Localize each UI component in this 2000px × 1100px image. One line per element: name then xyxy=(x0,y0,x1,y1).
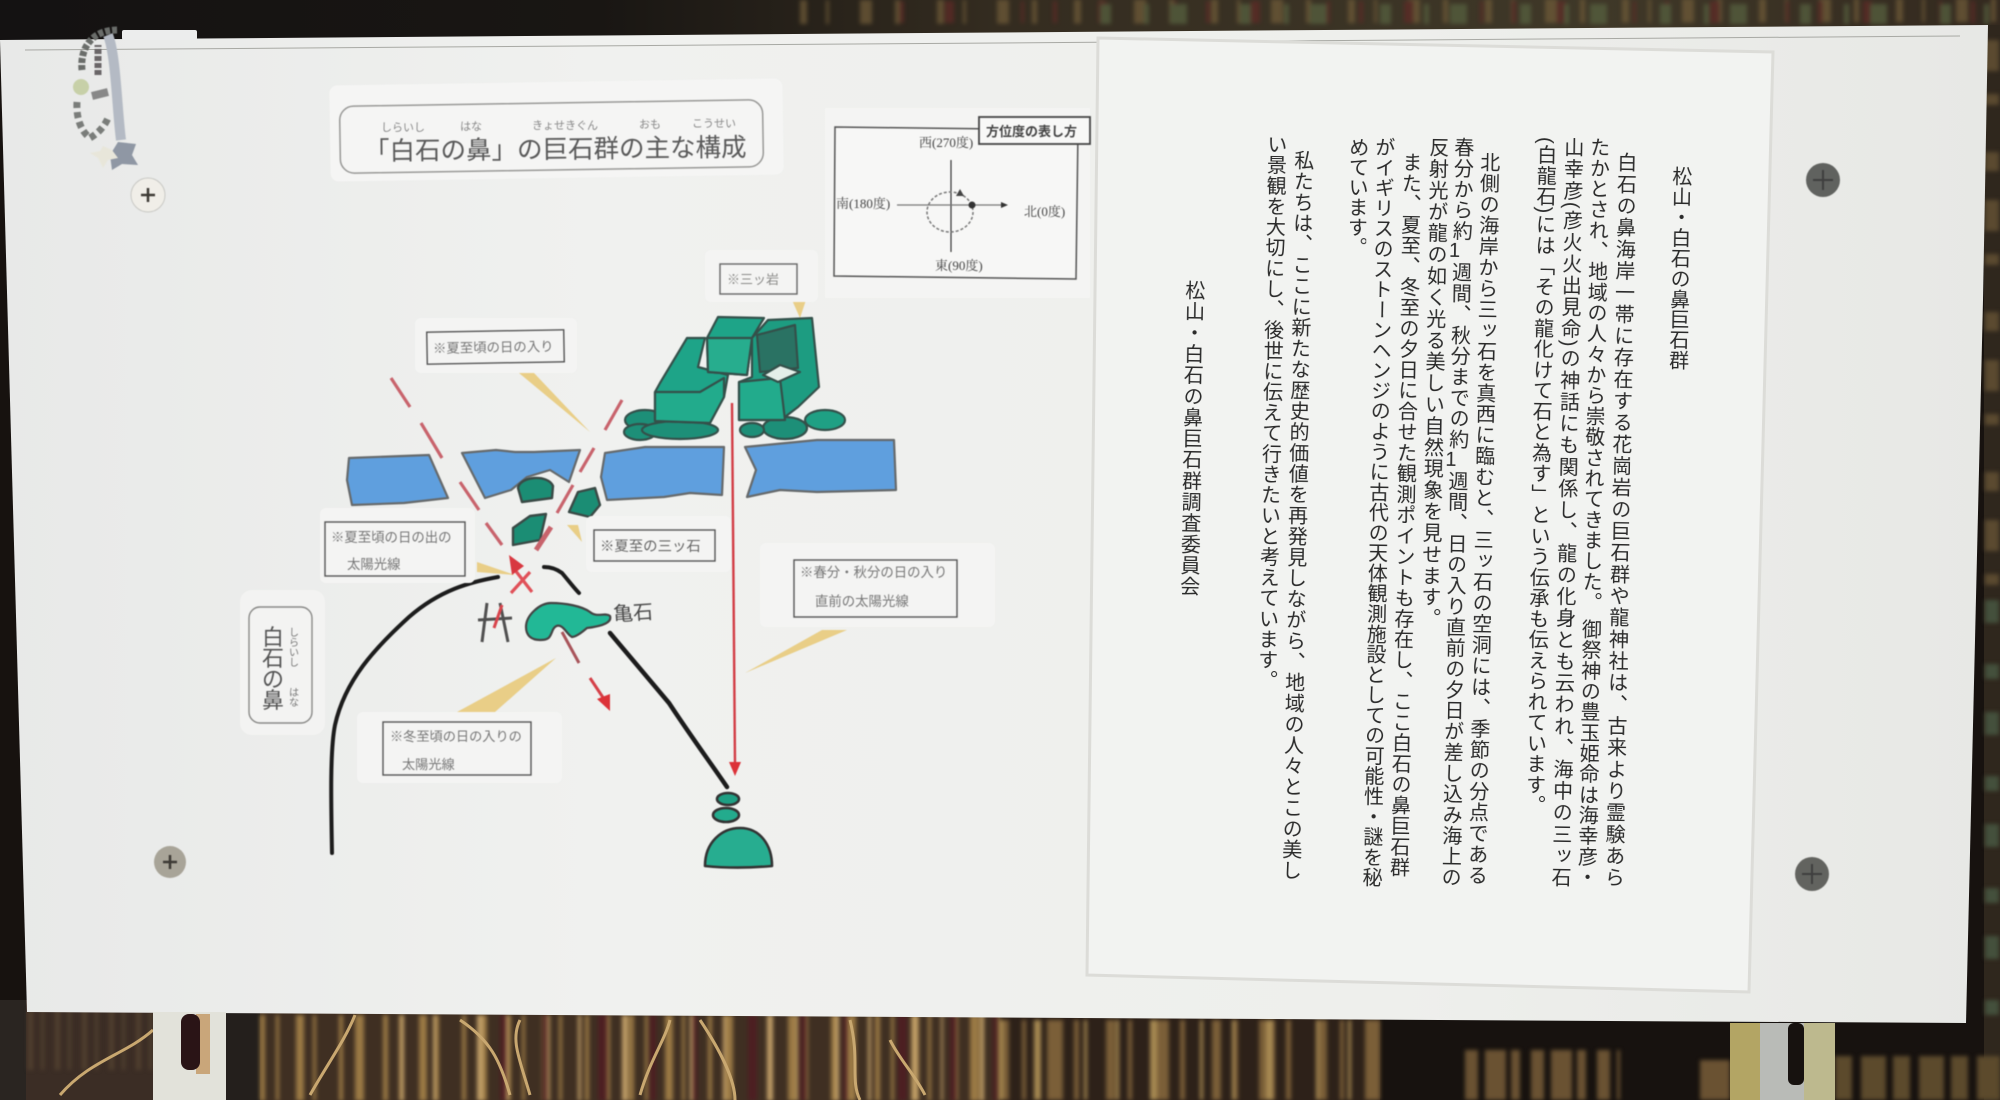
paragraph 2: 北側の海岸から三ッ石を真西に臨むと、三ッ石の空洞には、季節の分点である xyxy=(1464,152,1499,885)
charm hanging on the sign xyxy=(73,30,138,170)
label: 夏至の三ッ石: ※夏至の三ッ石 xyxy=(600,539,701,555)
beam wedges: sunlight xyxy=(457,300,847,712)
label: 白石の鼻: ら xyxy=(289,637,299,649)
screw bottom left xyxy=(154,846,186,878)
label: 白石の鼻: の xyxy=(262,667,284,692)
title box: 「白石の鼻」の巨石群の主な構成 xyxy=(364,134,747,166)
title box: しらいし xyxy=(381,121,425,134)
paragraph 3: めています。 xyxy=(1344,137,1368,257)
turtle rock 亀石: 亀石 xyxy=(612,600,654,626)
title box: おも xyxy=(639,118,661,131)
left post xyxy=(153,1012,226,1100)
compass legend: 東(90度) xyxy=(935,258,983,273)
screw bottom right xyxy=(1795,857,1829,891)
paragraph 1: (白龍石)には「その龍化けて石と為す」という伝承も伝えられています。 xyxy=(1522,137,1556,815)
label: 三ッ岩: ※三ッ岩 xyxy=(727,272,779,287)
paragraph 1: 白石の鼻海岸一帯に存在する花崗岩の巨石群や龍神社は、古来より霊験あら xyxy=(1601,152,1636,887)
red dashed sun rays xyxy=(391,378,622,593)
label: 冬至頃: ※冬至頃の日の入りの xyxy=(390,729,522,744)
compass legend: 南(180度) xyxy=(836,196,890,211)
text heading: 松山・白石の鼻巨石群 xyxy=(1665,166,1691,370)
label: 三ッ岩 xyxy=(705,250,818,302)
screw top left xyxy=(131,178,165,212)
label: 白石の鼻: し xyxy=(289,627,299,639)
label: 冬至頃 xyxy=(357,712,562,783)
label: 夏至頃の日の出: ※夏至頃の日の出の xyxy=(331,530,452,545)
small rocks: 三ッ石 xyxy=(513,478,600,545)
label: 春分・秋分: 直前の太陽光線 xyxy=(815,593,909,609)
paragraph 4: 私たちは、ここに新たな歴史的価値を再発見しながら、地域の人々とこの美し xyxy=(1278,150,1313,880)
big rocks: 三ッ岩 xyxy=(624,317,845,440)
paragraph 2: 反射光が龍の如く光る美しい自然現象を見せます。 xyxy=(1417,137,1448,628)
paragraph 3: がイギリスのストーンヘンジのように古代の天体観測施設としての可能性・謎を秘 xyxy=(1359,137,1394,887)
label: 夏至頃の日の入り: ※夏至頃の日の入り xyxy=(433,339,554,356)
label: 春分・秋分 xyxy=(760,543,995,627)
paragraph 2: 春分から約 1 週間、秋分までの約 1 週間、日の入り直前の夕日が差し込み海上の xyxy=(1438,137,1473,887)
bottom stones xyxy=(705,793,772,868)
turtle rock 亀石 xyxy=(526,600,654,711)
label: 白石の鼻: い xyxy=(289,648,299,659)
paragraph 1: 山幸彦(彦火火出見命)の神話にも関係し、龍の化身とも云われ、海中の三ッ石 xyxy=(1548,137,1583,887)
compass legend: 北(0度) xyxy=(1024,204,1065,219)
compass legend: 方位度の表し方 xyxy=(986,124,1077,139)
signature: 松山・白石の鼻巨石群調査委員会 xyxy=(1176,280,1204,596)
label: 白石の鼻 xyxy=(240,590,325,735)
arrow: up-left summer ray xyxy=(509,555,524,575)
label: 白石の鼻: 石 xyxy=(262,646,284,671)
compass legend xyxy=(825,108,1090,298)
paragraph 1: たかとされ、地域の人々から崇敬されてきました。 御祭神の豊玉姫命は海幸彦・ xyxy=(1574,137,1609,887)
label: 夏至頃の日の入り xyxy=(415,318,577,373)
paragraph 4: い景観を大切にし、後世に伝えて行きたいと考えています。 xyxy=(1254,134,1286,690)
title box xyxy=(329,78,784,182)
compass legend: 西(270度) xyxy=(919,135,973,150)
sea: blue water areas xyxy=(347,440,896,505)
label: 白石の鼻: し xyxy=(289,657,299,669)
screw top right xyxy=(1806,163,1840,197)
label: 夏至頃の日の出: 太陽光線 xyxy=(347,557,401,572)
label: 白石の鼻: は xyxy=(289,687,299,699)
title box: はな xyxy=(460,120,482,133)
label: 夏至頃の日の出 xyxy=(320,508,475,583)
title box: こうせい xyxy=(692,117,736,130)
paragraph 3: また、夏至、冬至の夕日に合せた観測ポイントも存在し、ここ白石の鼻巨石群 xyxy=(1386,152,1421,877)
equinox vertical red arrow xyxy=(729,403,741,776)
label: 白石の鼻: 鼻 xyxy=(262,688,284,713)
label: 白石の鼻: な xyxy=(289,697,299,709)
shoreline: black lines xyxy=(331,567,727,853)
title box: きょせきぐん xyxy=(532,119,598,132)
right post xyxy=(1730,1023,1835,1100)
label: 春分・秋分: ※春分・秋分の日の入り xyxy=(800,565,947,580)
label: 白石の鼻: 白 xyxy=(262,625,284,650)
label: 冬至頃: 太陽光線 xyxy=(402,757,455,772)
torii gate xyxy=(478,603,512,642)
label: 夏至の三ッ石 xyxy=(586,516,731,572)
